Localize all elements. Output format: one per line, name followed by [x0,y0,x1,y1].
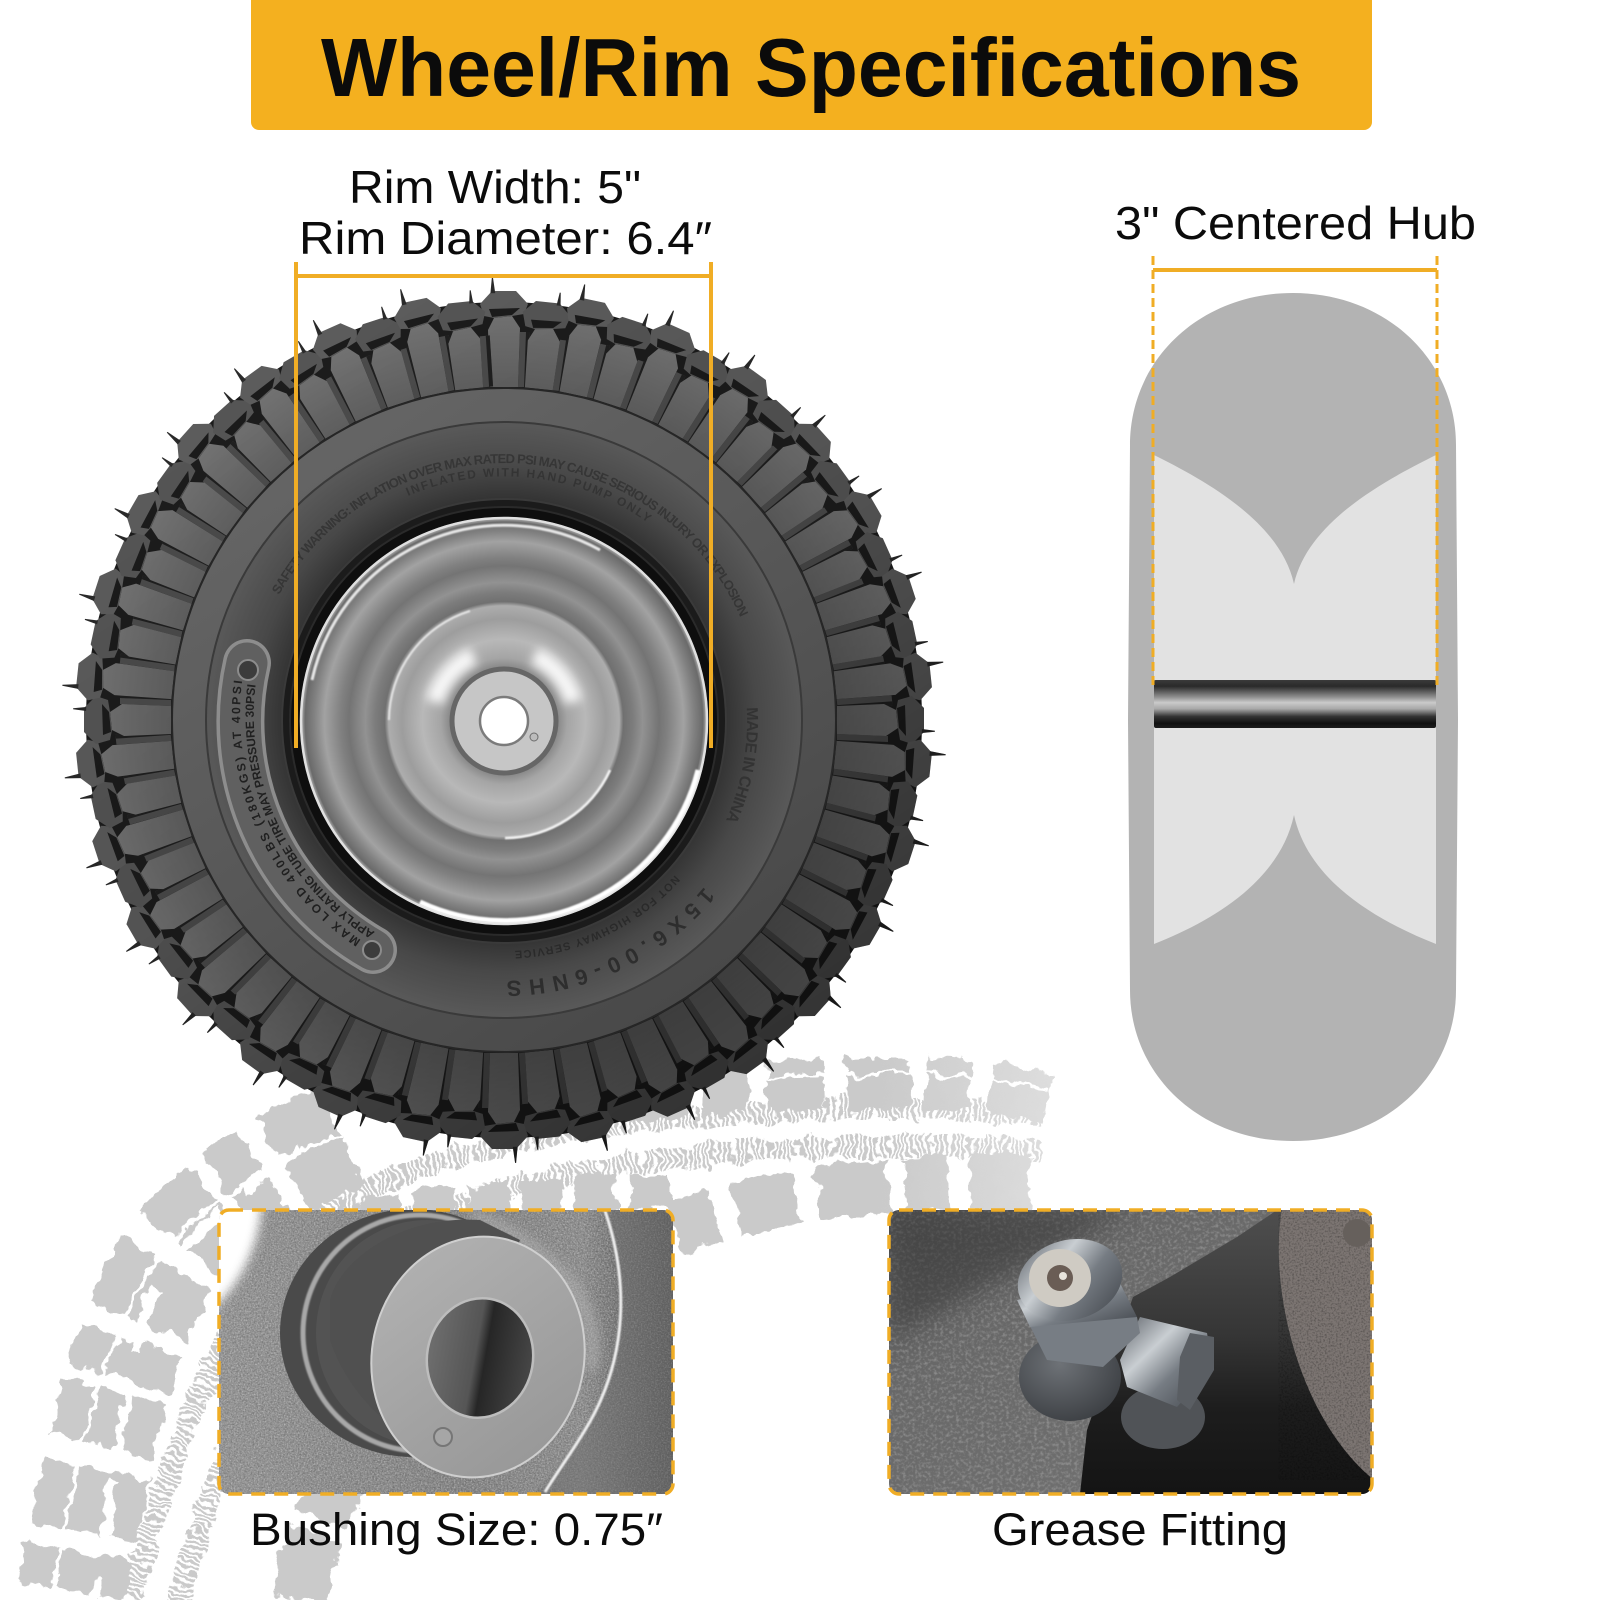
title banner [251,0,1372,130]
bushing photo panel [205,1196,690,1555]
photo: nipple body [1017,1284,1137,1327]
bushing panel dashed border [219,1210,673,1494]
tire tracks background [50,1074,1048,1600]
photo: stamp mark [434,1428,452,1446]
grease panel dashed border [889,1210,1372,1494]
track: outer hatch band [132,1108,1040,1600]
photo: white corner glare [219,1210,268,1312]
steel rim [300,517,708,925]
rim hub and bore [452,669,556,773]
hub lower light panel [1154,726,1436,944]
track: inner hatch band [176,1145,1040,1600]
sidewall text: warning: SAFETY WARNING: INFLATION OVER MAX RATED PSI MAY CAUSE SERIOUS INJURY OR EXPLOSION [272,454,748,616]
sidewall: outer ring [172,388,836,1052]
track: left lugs [50,1135,340,1600]
sidewall plaque: MAX LOAD 400LBS (180KGS) AT 40PSI [232,680,360,946]
photo: nipple head [1018,1239,1122,1320]
photo: boss recess [280,1210,467,1457]
sidewall plaque [216,639,397,974]
photo: collar [1027,1317,1140,1367]
sidewall plaque: APPLY RATING TUBE TIRE MAY PRESSURE 30PSI [245,684,374,938]
grease caption: Grease Fitting [992,1504,1288,1555]
track: upper right lugs [600,1074,1048,1102]
hub diagram [1115,197,1476,1141]
hub bracket [1153,256,1437,687]
photo: bore [426,1297,534,1419]
sidewall text: tire size: NOT FOR HIGHWAY SERVICE [515,876,680,958]
wheel photo [62,278,946,1163]
photo: hex end [1177,1333,1214,1410]
grease fitting photo panel [889,1208,1374,1555]
bead ring [282,499,726,943]
photo: bushing cylinder [446,1220,520,1242]
hub capsule [1128,293,1458,1141]
tread lugs [0,172,1076,1268]
sidewall text: tire size: 15X6.00-6NHS [508,888,713,996]
tread directional shading [92,358,946,1163]
hub upper light panel [1154,455,1436,680]
photo: rim dish shading [538,1210,673,1494]
sidewall text: warning: INFLATED WITH HAND PUMP ONLY [406,468,652,520]
photo: dark hub body [1080,1208,1374,1494]
rim dimension label: Rim Diameter: 6.4″ [299,212,712,264]
bushing caption: Bushing Size: 0.75″ [250,1504,663,1555]
sidewall text: made in china: MADE IN CHINA [726,708,758,821]
photo: threaded elbow [1120,1317,1213,1407]
photo: fitting ball [1019,1342,1121,1421]
rim dimension bracket [296,262,711,748]
photo: shadow patch [889,1210,1130,1340]
photo: washer [370,1236,586,1478]
photo: lower nut [1121,1392,1205,1449]
hub label: 3" Centered Hub [1115,197,1476,249]
sidewall: inner panel [206,422,802,1018]
hub axle bar [1154,680,1436,728]
track: lower right lugs [300,1182,1030,1600]
rim dimension label: Rim Width: 5" [349,161,641,213]
title: Wheel/Rim Specifications [321,21,1301,114]
rim dimension label [299,161,712,264]
photo: cast disc [1279,1208,1374,1480]
